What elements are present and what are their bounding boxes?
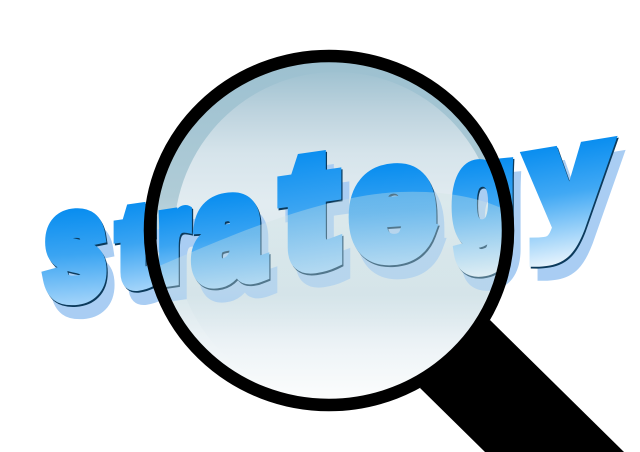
lens ring [150, 56, 508, 405]
word: strategy: y [530, 93, 607, 262]
word dark edge: e [352, 115, 435, 294]
word dark edge: r [159, 169, 190, 309]
word: strategy: t [284, 119, 336, 302]
lens glare overlay [160, 192, 502, 302]
word dark edge: y [531, 94, 609, 264]
word dark edge: t [285, 121, 337, 304]
word dark edge: s [46, 163, 106, 331]
word shadow: a [202, 159, 271, 327]
word shadow: t [292, 133, 344, 316]
word shadow [53, 107, 615, 343]
word: strategy: e [351, 113, 433, 292]
word: strategy [45, 93, 607, 329]
word dark edge: t [119, 182, 153, 313]
handle [420, 320, 624, 452]
word dark edge [46, 94, 609, 331]
word: strategy: r [158, 167, 189, 308]
word: strategy: g [453, 114, 514, 273]
word shadow: s [53, 176, 113, 343]
word shadow: e [359, 127, 441, 306]
word dark edge: g [454, 116, 515, 274]
word: strategy: t [118, 180, 152, 312]
word shadow: t [126, 194, 160, 326]
word shadow: r [166, 181, 197, 322]
word shadow: g [461, 128, 522, 287]
word: strategy: s [45, 162, 105, 329]
word: strategy: a [194, 145, 263, 313]
word shadow: y [538, 107, 615, 276]
lens background [156, 62, 502, 400]
word dark edge: a [195, 147, 265, 315]
